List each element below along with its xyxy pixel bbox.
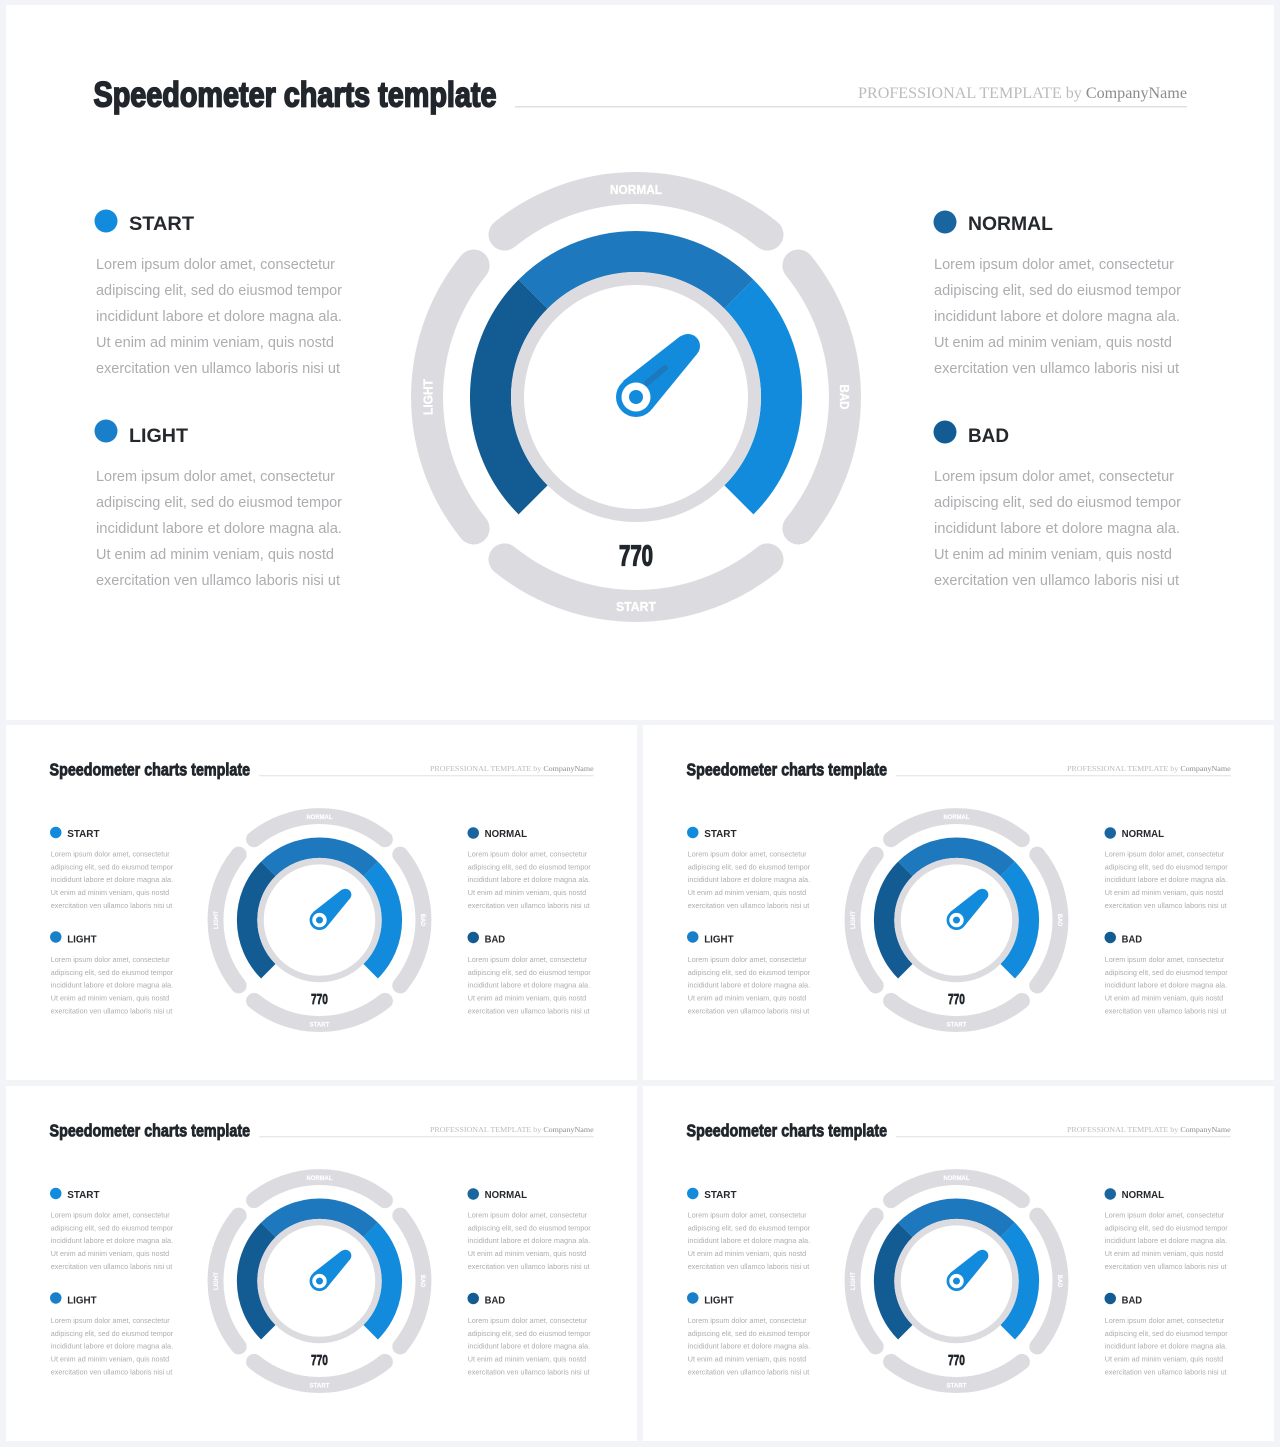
legend: normal: Ut enim ad minim veniam, quis nostd — [468, 1249, 586, 1258]
legend: start: Lorem ipsum dolor amet, consectetur — [51, 1210, 170, 1219]
legend: normal: adipiscing elit, sed do eiusmod tempor — [1105, 862, 1228, 871]
title: Speedometer charts template — [687, 1121, 887, 1141]
legend: light: exercitation ven ullamco laboris nisi ut — [51, 1368, 172, 1377]
legend: light: adipiscing elit, sed do eiusmod tempor — [51, 1329, 174, 1338]
panel: small slide top right — [643, 725, 1274, 1080]
legend: normal: exercitation ven ullamco laboris nisi ut — [1105, 901, 1227, 910]
legend: normal: adipiscing elit, sed do eiusmod tempor — [468, 862, 591, 871]
legend: normal: incididunt labore et dolore magna ala. — [468, 1236, 590, 1245]
legend: start: exercitation ven ullamco laboris nisi ut — [688, 901, 809, 910]
legend: light: Lorem ipsum dolor amet, consectetur — [96, 469, 335, 485]
speedometer gauge: LIGHT — [422, 379, 436, 415]
legend: start: Lorem ipsum dolor amet, consectetur — [96, 257, 335, 273]
speedometer gauge: 770 — [619, 540, 653, 572]
legend: normal: NORMAL — [485, 1190, 527, 1201]
legend: bad: Ut enim ad minim veniam, quis nostd — [468, 994, 586, 1003]
legend: bad: incididunt labore et dolore magna ala. — [934, 521, 1180, 537]
legend: bad: incididunt labore et dolore magna ala. — [468, 981, 590, 990]
speedometer gauge — [422, 183, 851, 614]
legend: start: START — [704, 829, 737, 840]
legend: light: LIGHT — [129, 425, 188, 447]
speedometer gauge: NORMAL — [307, 1175, 333, 1182]
legend: normal: NORMAL — [968, 213, 1053, 235]
legend: bad: incididunt labore et dolore magna ala. — [1105, 1342, 1227, 1351]
legend: bad: Lorem ipsum dolor amet, consectetur — [468, 955, 588, 964]
legend: light: incididunt labore et dolore magna ala. — [51, 1342, 173, 1351]
speedometer gauge: LIGHT — [850, 1272, 857, 1290]
legend: light: LIGHT — [704, 934, 734, 945]
legend: normal: Ut enim ad minim veniam, quis nostd — [934, 335, 1172, 351]
legend: light: exercitation ven ullamco laboris nisi ut — [51, 1007, 172, 1016]
legend: start — [50, 1188, 174, 1271]
title: Speedometer charts template — [94, 76, 496, 114]
legend: start: incididunt labore et dolore magna ala. — [51, 875, 173, 884]
speedometer gauge — [213, 1175, 426, 1390]
legend: bad: BAD — [1122, 934, 1142, 945]
subtitle: PROFESSIONAL TEMPLATE by CompanyName — [1067, 1125, 1231, 1134]
legend: normal — [1105, 1188, 1228, 1271]
legend: bad: exercitation ven ullamco laboris nisi ut — [1105, 1368, 1227, 1377]
subtitle: PROFESSIONAL TEMPLATE by CompanyName — [858, 85, 1187, 102]
legend: normal: Ut enim ad minim veniam, quis nostd — [468, 888, 586, 897]
legend: light: exercitation ven ullamco laboris nisi ut — [96, 573, 340, 589]
speedometer gauge: BAD — [419, 914, 426, 927]
legend: start: START — [129, 213, 194, 235]
legend: light: LIGHT — [67, 934, 97, 945]
legend: light — [687, 931, 811, 1016]
legend: normal: exercitation ven ullamco laboris nisi ut — [934, 361, 1179, 377]
legend: bad — [468, 932, 591, 1016]
legend: normal — [934, 210, 1181, 377]
legend: light: exercitation ven ullamco laboris nisi ut — [688, 1368, 809, 1377]
speedometer gauge: NORMAL — [307, 814, 333, 821]
legend: normal: exercitation ven ullamco laboris nisi ut — [468, 1262, 590, 1271]
legend: bad: incididunt labore et dolore magna ala. — [1105, 981, 1227, 990]
subtitle: PROFESSIONAL TEMPLATE by CompanyName — [430, 764, 594, 773]
subtitle: PROFESSIONAL TEMPLATE by CompanyName — [430, 1125, 594, 1134]
legend: light: Lorem ipsum dolor amet, consectetur — [51, 1316, 170, 1325]
speedometer gauge — [850, 1175, 1063, 1390]
speedometer gauge: LIGHT — [213, 911, 220, 929]
legend: start: adipiscing elit, sed do eiusmod tempor — [96, 283, 342, 299]
legend: light: Ut enim ad minim veniam, quis nostd — [688, 1355, 806, 1364]
legend: start: exercitation ven ullamco laboris nisi ut — [51, 901, 172, 910]
legend: light: LIGHT — [67, 1295, 97, 1306]
legend: normal: adipiscing elit, sed do eiusmod tempor — [1105, 1223, 1228, 1232]
legend: light: LIGHT — [704, 1295, 734, 1306]
title: Speedometer charts template — [50, 760, 250, 780]
legend: light: Ut enim ad minim veniam, quis nostd — [688, 994, 806, 1003]
speedometer gauge: NORMAL — [944, 814, 970, 821]
title: Speedometer charts template — [687, 760, 887, 780]
legend: bad: BAD — [485, 934, 505, 945]
legend: start: adipiscing elit, sed do eiusmod tempor — [51, 862, 174, 871]
legend: light: Ut enim ad minim veniam, quis nostd — [96, 547, 334, 563]
legend: normal: incididunt labore et dolore magna ala. — [934, 309, 1180, 325]
speedometer gauge: 770 — [948, 992, 965, 1008]
panel: small slide bottom left — [6, 1086, 637, 1441]
legend: start: exercitation ven ullamco laboris nisi ut — [51, 1262, 172, 1271]
legend: bad — [934, 420, 1181, 589]
legend: start — [50, 827, 174, 910]
legend: start: Ut enim ad minim veniam, quis nostd — [688, 888, 806, 897]
speedometer gauge: BAD — [419, 1275, 426, 1288]
legend: start: exercitation ven ullamco laboris nisi ut — [688, 1262, 809, 1271]
speedometer gauge: 770 — [311, 1353, 328, 1369]
speedometer gauge — [850, 814, 1063, 1029]
legend: start: incididunt labore et dolore magna ala. — [688, 875, 810, 884]
legend: start — [94, 210, 342, 377]
legend: normal: adipiscing elit, sed do eiusmod tempor — [468, 1223, 591, 1232]
speedometer gauge: BAD — [1056, 1275, 1063, 1288]
legend: bad: incididunt labore et dolore magna ala. — [468, 1342, 590, 1351]
legend: light: Ut enim ad minim veniam, quis nostd — [51, 1355, 169, 1364]
speedometer gauge: LIGHT — [213, 1272, 220, 1290]
legend: light: Lorem ipsum dolor amet, consectetur — [51, 955, 170, 964]
legend: light: exercitation ven ullamco laboris nisi ut — [688, 1007, 809, 1016]
legend: normal: NORMAL — [485, 829, 527, 840]
speedometer gauge: NORMAL — [944, 1175, 970, 1182]
legend: start: Ut enim ad minim veniam, quis nostd — [688, 1249, 806, 1258]
legend: bad: Lorem ipsum dolor amet, consectetur — [468, 1316, 588, 1325]
subtitle: PROFESSIONAL TEMPLATE by CompanyName — [1067, 764, 1231, 773]
legend: start: incididunt labore et dolore magna ala. — [688, 1236, 810, 1245]
legend: start: exercitation ven ullamco laboris nisi ut — [96, 361, 340, 377]
legend: light: incididunt labore et dolore magna ala. — [688, 1342, 810, 1351]
title: Speedometer charts template — [50, 1121, 250, 1141]
legend: normal: incididunt labore et dolore magna ala. — [1105, 875, 1227, 884]
legend: normal: Lorem ipsum dolor amet, consectetur — [1105, 849, 1225, 858]
legend: normal: NORMAL — [1122, 1190, 1164, 1201]
legend: bad: Ut enim ad minim veniam, quis nostd — [468, 1355, 586, 1364]
legend: normal: adipiscing elit, sed do eiusmod tempor — [934, 283, 1181, 299]
speedometer gauge: BAD — [837, 384, 851, 410]
speedometer gauge: BAD — [1056, 914, 1063, 927]
legend: light: adipiscing elit, sed do eiusmod tempor — [96, 495, 342, 511]
speedometer gauge: START — [310, 1022, 330, 1029]
legend: bad: exercitation ven ullamco laboris nisi ut — [1105, 1007, 1227, 1016]
legend: light: incididunt labore et dolore magna ala. — [688, 981, 810, 990]
legend: start: adipiscing elit, sed do eiusmod tempor — [688, 862, 811, 871]
legend: start: START — [67, 1190, 100, 1201]
speedometer gauge: START — [616, 600, 656, 614]
legend: start: Ut enim ad minim veniam, quis nostd — [96, 335, 334, 351]
panel: small slide bottom right — [643, 1086, 1274, 1441]
legend: start — [687, 827, 811, 910]
speedometer gauge: START — [947, 1383, 967, 1390]
legend: light — [50, 1292, 174, 1377]
speedometer gauge: START — [947, 1022, 967, 1029]
panel: main speedometer slide — [6, 5, 1274, 720]
legend: bad: Ut enim ad minim veniam, quis nostd — [1105, 994, 1223, 1003]
legend: bad — [468, 1293, 591, 1377]
legend: start: START — [704, 1190, 737, 1201]
legend: normal: Lorem ipsum dolor amet, consectetur — [468, 849, 588, 858]
legend: start: incididunt labore et dolore magna ala. — [51, 1236, 173, 1245]
speedometer gauge: 770 — [948, 1353, 965, 1369]
legend: bad: exercitation ven ullamco laboris nisi ut — [468, 1368, 590, 1377]
legend: normal: exercitation ven ullamco laboris nisi ut — [468, 901, 590, 910]
legend: light: adipiscing elit, sed do eiusmod tempor — [688, 968, 811, 977]
legend: start: adipiscing elit, sed do eiusmod tempor — [51, 1223, 174, 1232]
speedometer gauge: LIGHT — [850, 911, 857, 929]
legend: normal: Lorem ipsum dolor amet, consectetur — [468, 1210, 588, 1219]
legend: bad: Lorem ipsum dolor amet, consectetur — [1105, 955, 1225, 964]
legend: light: incididunt labore et dolore magna ala. — [51, 981, 173, 990]
legend: normal — [1105, 827, 1228, 910]
legend: normal: Lorem ipsum dolor amet, consectetur — [1105, 1210, 1225, 1219]
legend: start: adipiscing elit, sed do eiusmod tempor — [688, 1223, 811, 1232]
legend: normal: incididunt labore et dolore magna ala. — [1105, 1236, 1227, 1245]
legend: normal — [468, 827, 591, 910]
speedometer gauge: START — [310, 1383, 330, 1390]
legend: light: Lorem ipsum dolor amet, consectetur — [688, 955, 807, 964]
legend: bad: adipiscing elit, sed do eiusmod tempor — [1105, 968, 1228, 977]
legend: bad: Ut enim ad minim veniam, quis nostd — [1105, 1355, 1223, 1364]
legend: normal: incididunt labore et dolore magna ala. — [468, 875, 590, 884]
legend: light: incididunt labore et dolore magna ala. — [96, 521, 342, 537]
legend: start: Ut enim ad minim veniam, quis nostd — [51, 1249, 169, 1258]
legend: start: incididunt labore et dolore magna ala. — [96, 309, 342, 325]
legend: bad: BAD — [485, 1295, 505, 1306]
legend: start — [687, 1188, 811, 1271]
legend: bad — [1105, 932, 1228, 1016]
legend: start: Lorem ipsum dolor amet, consectetur — [688, 1210, 807, 1219]
legend: normal: exercitation ven ullamco laboris nisi ut — [1105, 1262, 1227, 1271]
legend: normal: NORMAL — [1122, 829, 1164, 840]
legend: bad: Ut enim ad minim veniam, quis nostd — [934, 547, 1172, 563]
legend: bad: BAD — [1122, 1295, 1142, 1306]
legend: normal: Ut enim ad minim veniam, quis nostd — [1105, 1249, 1223, 1258]
legend: normal: Lorem ipsum dolor amet, consectetur — [934, 257, 1174, 273]
panel: small slide top left — [6, 725, 637, 1080]
legend: start: Ut enim ad minim veniam, quis nostd — [51, 888, 169, 897]
legend: light — [687, 1292, 811, 1377]
legend: start: Lorem ipsum dolor amet, consectetur — [688, 849, 807, 858]
legend: light: adipiscing elit, sed do eiusmod tempor — [51, 968, 174, 977]
speedometer gauge — [213, 814, 426, 1029]
legend: bad: BAD — [968, 425, 1009, 447]
legend: bad: adipiscing elit, sed do eiusmod tempor — [1105, 1329, 1228, 1338]
legend: normal — [468, 1188, 591, 1271]
speedometer gauge: NORMAL — [610, 183, 662, 197]
legend: bad: adipiscing elit, sed do eiusmod tempor — [468, 968, 591, 977]
legend: bad: adipiscing elit, sed do eiusmod tempor — [468, 1329, 591, 1338]
legend: start: START — [67, 829, 100, 840]
legend: light — [50, 931, 174, 1016]
legend: bad: exercitation ven ullamco laboris nisi ut — [934, 573, 1179, 589]
legend: light — [94, 420, 342, 589]
legend: start: Lorem ipsum dolor amet, consectetur — [51, 849, 170, 858]
legend: bad — [1105, 1293, 1228, 1377]
legend: light: Lorem ipsum dolor amet, consectetur — [688, 1316, 807, 1325]
legend: normal: Ut enim ad minim veniam, quis nostd — [1105, 888, 1223, 897]
legend: bad: Lorem ipsum dolor amet, consectetur — [934, 469, 1174, 485]
legend: light: Ut enim ad minim veniam, quis nostd — [51, 994, 169, 1003]
speedometer gauge: 770 — [311, 992, 328, 1008]
legend: light: adipiscing elit, sed do eiusmod tempor — [688, 1329, 811, 1338]
legend: bad: exercitation ven ullamco laboris nisi ut — [468, 1007, 590, 1016]
legend: bad: Lorem ipsum dolor amet, consectetur — [1105, 1316, 1225, 1325]
legend: bad: adipiscing elit, sed do eiusmod tempor — [934, 495, 1181, 511]
